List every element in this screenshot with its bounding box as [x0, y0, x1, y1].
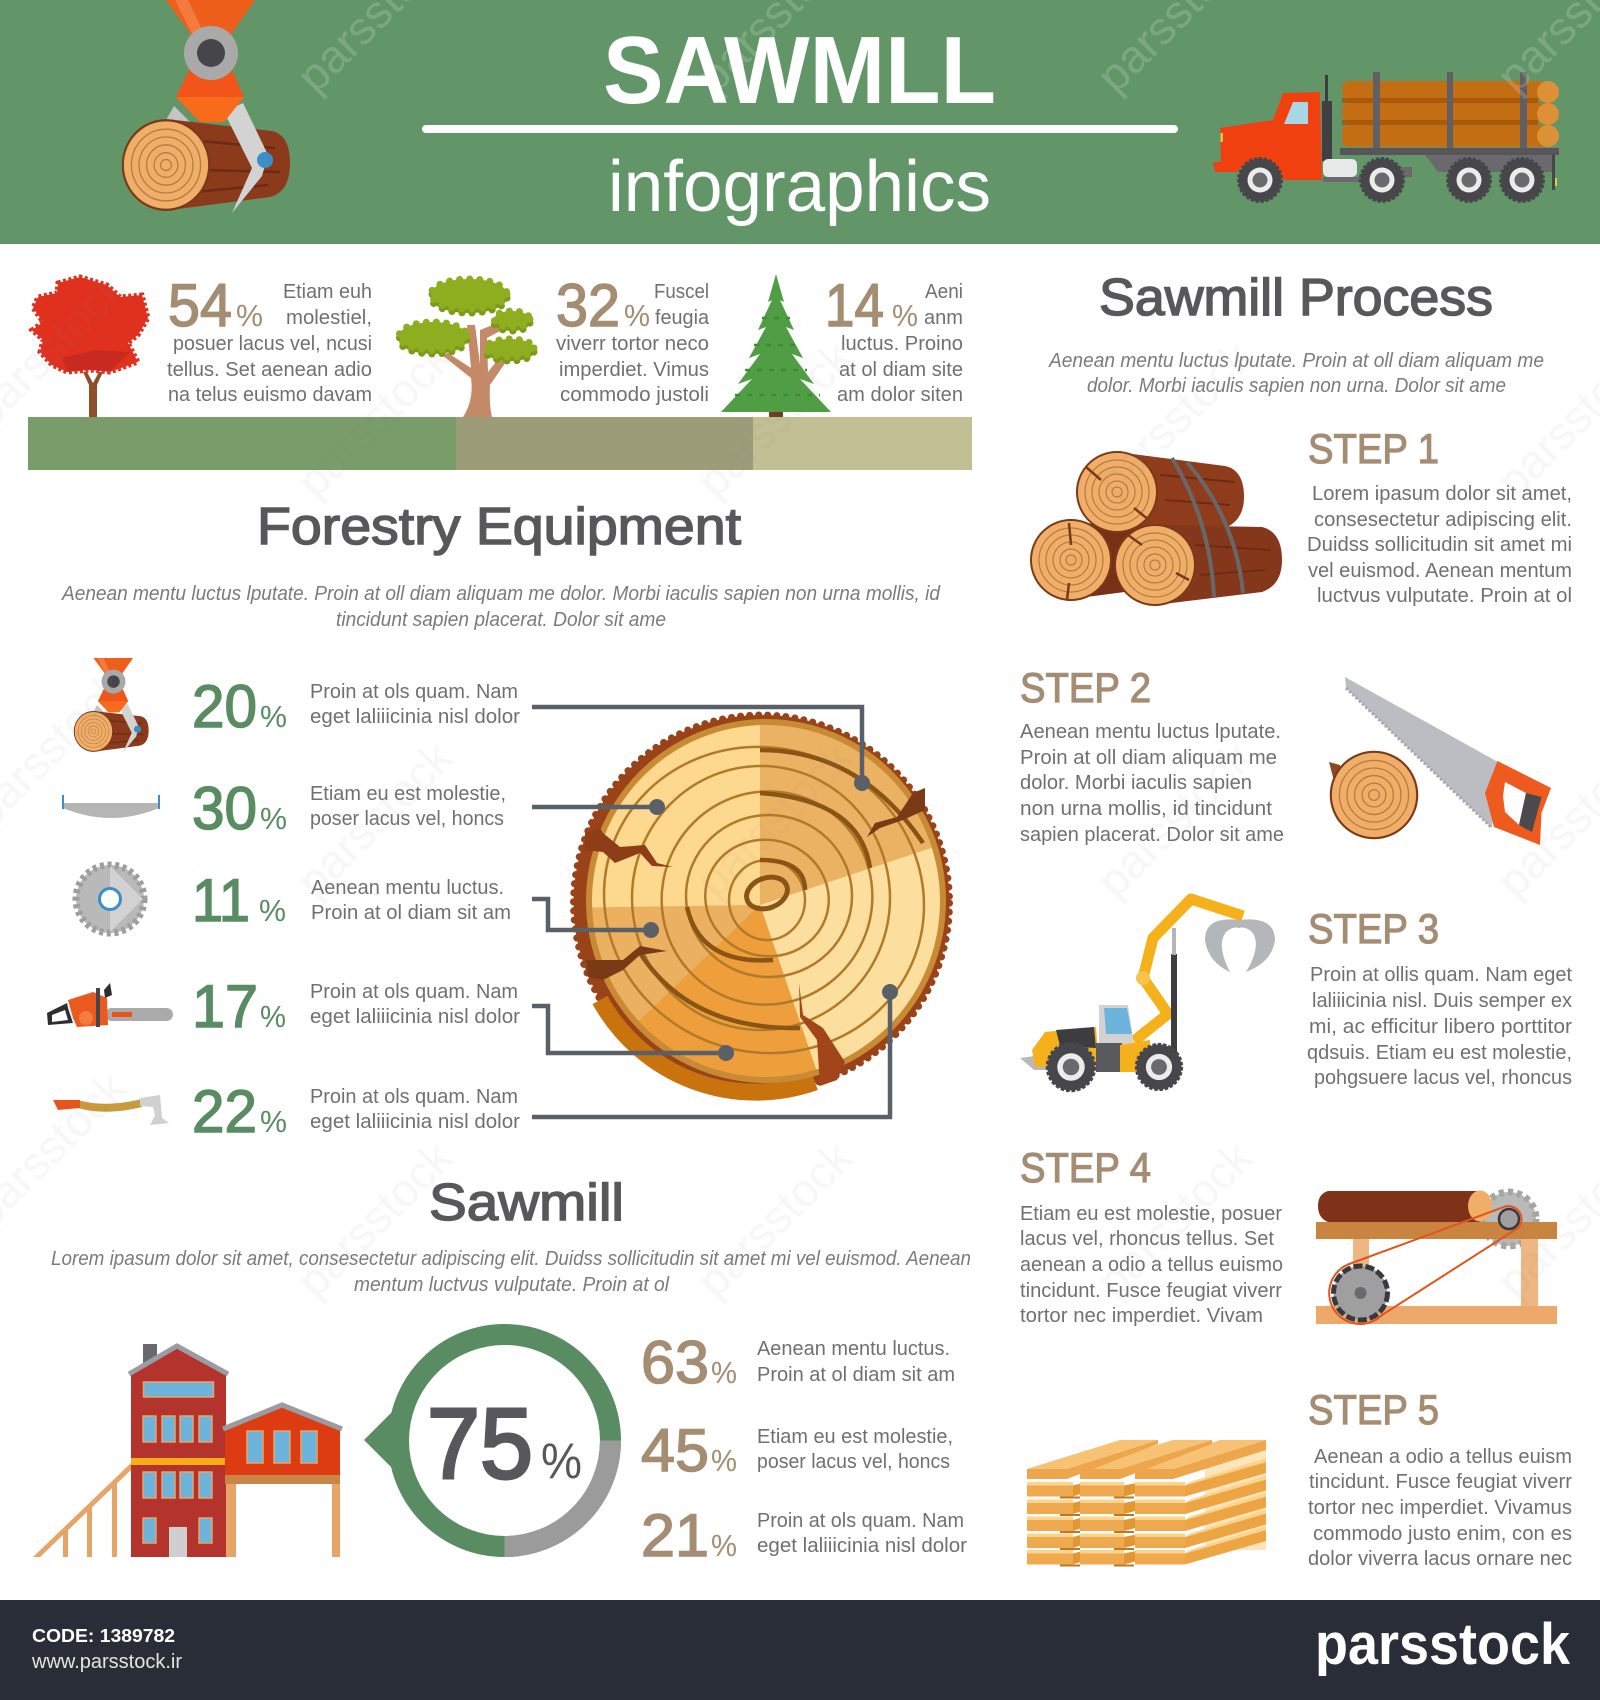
icon: axe — [53, 1095, 169, 1125]
54 percent text: Etiam euh — [283, 281, 372, 303]
stat: 17 percent: Proin at ols quam. Nam — [310, 981, 518, 1003]
step 2 — [1020, 664, 1284, 846]
footer code and url: CODE: 1389782 — [32, 1626, 175, 1646]
step 5: dolor viverra lacus ornare nec — [1308, 1548, 1572, 1570]
stat: 21 percent: % — [711, 1528, 737, 1563]
step 4: STEP 4 — [1020, 1144, 1151, 1191]
54 percent text: posuer lacus vel, ncusi — [173, 333, 372, 355]
32 percent text — [556, 272, 710, 406]
stat: 20 percent — [192, 673, 520, 740]
forestry intro text — [61, 583, 941, 631]
text: parsstock — [286, 730, 463, 907]
step 3: mi, ac efficitur libero porttitor — [1309, 1016, 1572, 1038]
stat: 21 percent: Proin at ols quam. Nam — [757, 1510, 964, 1532]
ground bar — [28, 417, 972, 470]
32 percent text: 32 — [556, 272, 620, 339]
forestry intro text: Aenean mentu luctus lputate. Proin at oll diam aliquam me dolor. Morbi iaculis sapien non urna mollis, id — [61, 583, 941, 605]
stat: 45 percent — [641, 1417, 953, 1484]
54 percent text: na telus euismo davam — [168, 384, 372, 406]
stat: 17 percent: % — [260, 999, 286, 1034]
54 percent text: molestiel, — [286, 307, 372, 329]
footer band — [0, 1600, 1600, 1700]
sawmill intro text: Lorem ipasum dolor sit amet, consesectetur adipiscing elit. Duidss sollicitudin sit amet mi vel euismod. Aenean — [51, 1248, 971, 1270]
text: parsstock — [686, 330, 863, 507]
icon: circular saw blade — [76, 865, 144, 933]
heading: Forestry Equipment: Forestry Equipment — [257, 498, 742, 556]
step 2: dolor. Morbi iaculis sapien — [1020, 772, 1252, 794]
step 1: vel euismod. Aenean mentum — [1308, 560, 1572, 582]
stat: 22 percent: 22 — [192, 1078, 257, 1145]
header band — [0, 0, 1600, 244]
step 4: lacus vel, rhoncus tellus. Set — [1020, 1228, 1274, 1250]
sawmill intro text — [51, 1248, 971, 1296]
step 5: tincidunt. Fusce feugiat viverr — [1309, 1471, 1572, 1493]
step 3: STEP 3 — [1308, 905, 1439, 952]
14 percent text: Aeni — [925, 281, 963, 303]
stat: 11 percent — [192, 867, 511, 934]
process intro text — [1048, 350, 1544, 397]
stat: 63 percent: 63 — [641, 1329, 709, 1396]
stat: 17 percent — [192, 973, 520, 1040]
stat: 22 percent: % — [260, 1104, 287, 1139]
stat: 20 percent: 20 — [192, 673, 257, 740]
title: SAWMLL: SAWMLL — [603, 17, 996, 124]
heading: Sawmill: Sawmill — [429, 1174, 624, 1232]
panel: tree species shares — [28, 272, 972, 470]
stat: 22 percent: eget laliiicinia nisl dolor — [310, 1111, 520, 1133]
outer bark — [574, 715, 950, 1091]
stat: 63 percent — [641, 1329, 955, 1396]
step 1: luctvus vulputate. Proin at ol — [1317, 585, 1572, 607]
text: parsstock — [1086, 330, 1263, 507]
32 percent text: Fuscel — [654, 281, 709, 303]
step 2: Proin at oll diam aliquam me — [1020, 747, 1277, 769]
step 5: Aenean a odio a tellus euism — [1314, 1446, 1572, 1468]
step 1: Duidss sollicitudin sit amet mi — [1307, 534, 1572, 556]
stat: 21 percent: eget laliiicinia nisl dolor — [757, 1535, 967, 1557]
stat: 63 percent: % — [711, 1355, 737, 1390]
icon: small claw — [74, 658, 149, 753]
stat: 11 percent: 11 — [192, 867, 250, 934]
stat: 22 percent: Proin at ols quam. Nam — [310, 1086, 518, 1108]
subtitle: infographics: infographics — [608, 147, 991, 227]
process intro text: dolor. Morbi iaculis sapien non urna. Dolor sit ame — [1087, 375, 1506, 397]
footer logo: parsstock — [1315, 1612, 1571, 1677]
cracks — [585, 788, 925, 1086]
icon: log loader — [1020, 899, 1275, 1091]
14 percent text — [825, 272, 963, 406]
step 4: aenean a odio a tellus euismo — [1020, 1254, 1283, 1276]
step 2: STEP 2 — [1020, 664, 1151, 711]
14 percent text: % — [892, 298, 918, 333]
stat: 30 percent: % — [260, 801, 287, 836]
stat: 20 percent: % — [260, 699, 287, 734]
chart: 75 percent donut: % — [541, 1433, 582, 1489]
step 3: laliiicinia nisl. Duis semper ex — [1312, 990, 1572, 1012]
lower bark band — [600, 1000, 815, 1092]
14 percent text: luctus. Proino — [841, 333, 963, 355]
54 percent text: tellus. Set aenean adio — [167, 359, 372, 381]
icon: saw bench machine — [1316, 1190, 1557, 1324]
stat: 11 percent: Proin at ol diam sit am — [311, 902, 511, 924]
54 percent text: 54 — [168, 272, 232, 339]
text: parsstock — [686, 730, 863, 907]
14 percent text: 14 — [825, 272, 884, 339]
32 percent text: % — [624, 298, 650, 333]
footer code and url — [31, 1626, 182, 1673]
step 2: sapien placerat. Dolor sit ame — [1020, 824, 1284, 846]
stat: 45 percent: % — [711, 1443, 737, 1478]
step 4: tincidunt. Fusce feugiat viverr — [1020, 1280, 1282, 1302]
14 percent text: at ol diam site — [839, 359, 963, 381]
step 2: non urna mollis, id tincidunt — [1020, 798, 1272, 820]
stat: 63 percent: Aenean mentu luctus. — [757, 1338, 950, 1360]
text: parsstock — [686, 1130, 863, 1307]
icon: stacked logs — [1031, 452, 1282, 605]
32 percent text: viverr tortor neco — [556, 333, 709, 355]
footer code and url: www.parsstock.ir — [31, 1651, 182, 1673]
stat: 45 percent: poser lacus vel, honcs — [757, 1451, 950, 1473]
step 4: tortor nec imperdiet. Vivam — [1020, 1305, 1263, 1327]
leader dots — [643, 775, 898, 1061]
step 4 — [1020, 1144, 1283, 1327]
stat: 30 percent — [192, 775, 506, 842]
text: parsstock — [1086, 1130, 1263, 1307]
step 3: Proin at ollis quam. Nam eget — [1310, 964, 1572, 986]
sapwood ring — [586, 719, 946, 1083]
stat: 11 percent: Aenean mentu luctus. — [311, 877, 504, 899]
chart: 75 percent donut: 75 — [427, 1388, 533, 1500]
icon: logging truck — [1213, 72, 1559, 202]
stat: 11 percent: % — [259, 893, 286, 928]
title rule — [422, 125, 1178, 133]
step 5: STEP 5 — [1308, 1386, 1439, 1433]
32 percent text: imperdiet. Vimus — [559, 359, 709, 381]
text: parsstock — [1086, 730, 1263, 907]
pie sectors — [592, 725, 940, 1077]
icon: log grabber claw — [123, 0, 290, 213]
stat: 45 percent: Etiam eu est molestie, — [757, 1426, 953, 1448]
step 1: Lorem ipasum dolor sit amet, — [1312, 483, 1572, 505]
icon: factory building — [33, 1344, 342, 1557]
icon: lumber stack — [1027, 1440, 1266, 1566]
step 3: pohgsuere lacus vel, rhoncus — [1314, 1067, 1572, 1089]
panel: sawmill — [33, 1174, 971, 1569]
step 3 — [1307, 905, 1572, 1089]
step 1: STEP 1 — [1308, 425, 1439, 472]
chart: 75 percent donut — [364, 1334, 610, 1546]
panel: sawmill process — [1020, 269, 1572, 1570]
stat: 22 percent — [192, 1078, 520, 1145]
icon: chainsaw — [47, 983, 173, 1027]
stat: 30 percent: 30 — [192, 775, 257, 842]
stat: 45 percent: 45 — [641, 1417, 709, 1484]
sawmill intro text: mentum luctvus vulputate. Proin at ol — [354, 1274, 670, 1296]
step 1 — [1307, 425, 1572, 607]
icon: two-man saw — [62, 795, 160, 818]
step 5 — [1308, 1386, 1572, 1570]
stat: 20 percent: eget laliiicinia nisl dolor — [310, 706, 520, 728]
step 1: consesectetur adipiscing elit. — [1314, 509, 1572, 531]
54 percent text — [167, 272, 372, 406]
32 percent text: feugia — [655, 307, 710, 329]
stat: 30 percent: Etiam eu est molestie, — [310, 783, 506, 805]
step 4: Etiam eu est molestie, posuer — [1020, 1203, 1282, 1225]
icon: hand saw and slice — [1329, 677, 1551, 845]
forestry intro text: tincidunt sapien placerat. Dolor sit ame — [336, 609, 666, 631]
stat: 63 percent: Proin at ol diam sit am — [757, 1364, 955, 1386]
process intro text: Aenean mentu luctus lputate. Proin at oll diam aliquam me — [1048, 350, 1544, 372]
stat: 20 percent: Proin at ols quam. Nam — [310, 681, 518, 703]
heading: Sawmill Process: Sawmill Process — [1099, 269, 1493, 327]
stat: 17 percent: eget laliiicinia nisl dolor — [310, 1006, 520, 1028]
step 3: qdsuis. Etiam eu est molestie, — [1307, 1042, 1572, 1064]
stat: 21 percent: 21 — [641, 1502, 709, 1569]
icon: red tree — [32, 277, 148, 417]
stat: 21 percent — [641, 1502, 967, 1569]
panel: forestry equipment — [47, 498, 1000, 1145]
14 percent text: anm — [924, 307, 963, 329]
icon: pine tree — [721, 274, 831, 417]
stat: 17 percent: 17 — [192, 973, 258, 1040]
text: parsstock — [286, 1130, 463, 1307]
icon: green tree — [399, 279, 534, 417]
32 percent text: commodo justoli — [560, 384, 709, 406]
step 5: tortor nec imperdiet. Vivamus — [1308, 1497, 1572, 1519]
title — [422, 17, 1178, 227]
step 2: Aenean mentu luctus lputate. — [1020, 721, 1281, 743]
leader lines — [532, 707, 890, 1117]
stat: 30 percent: poser lacus vel, honcs — [310, 808, 504, 830]
step 5: commodo justo enim, con es — [1313, 1523, 1572, 1545]
14 percent text: am dolor siten — [837, 384, 963, 406]
54 percent text: % — [236, 298, 263, 333]
chart: tree-ring pie — [532, 704, 953, 1120]
text: parsstock — [286, 330, 463, 507]
